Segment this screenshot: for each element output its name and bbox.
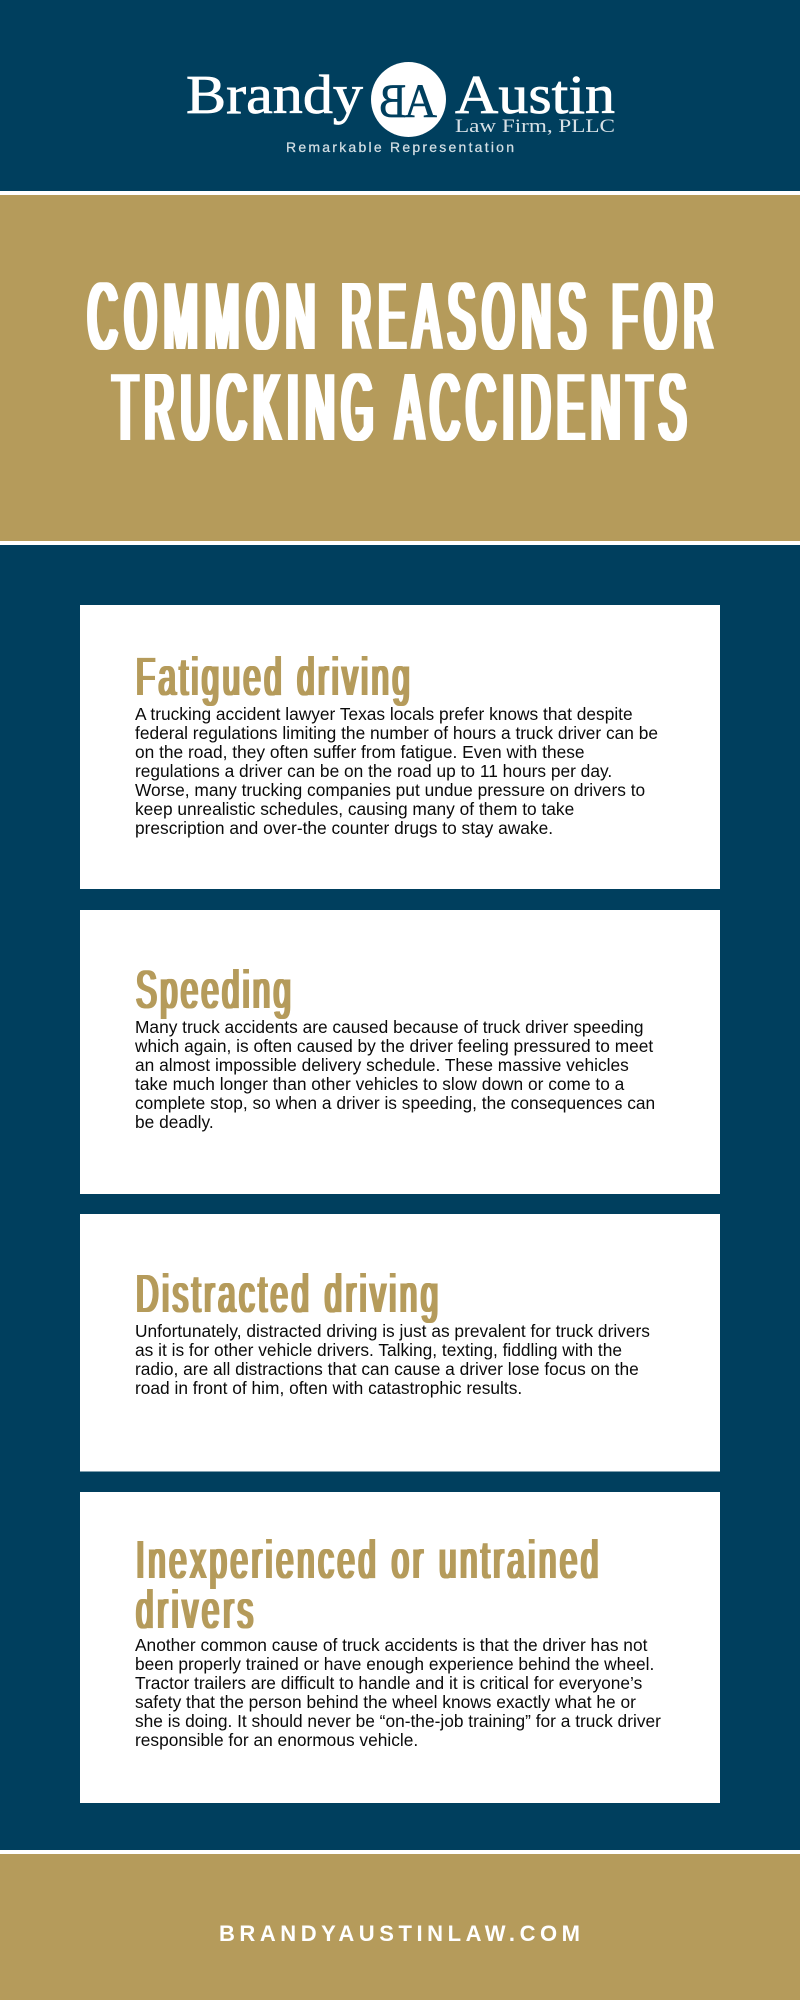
body text: distracted driving: road in front of him, often with catastrophic results. (135, 1378, 522, 1398)
white rule (0, 191, 800, 195)
logo (186, 62, 615, 155)
body text: speeding: be deadly. (135, 1112, 214, 1132)
logo emblem: BA monogram: A (404, 75, 437, 128)
panel: speeding (80, 910, 720, 1194)
white rule (0, 1850, 800, 1854)
logo wordmark: Brandy: Brandy (186, 64, 364, 125)
logo tagline: Remarkable Representation (286, 139, 514, 155)
body text: distracted driving: radio, are all distractions that can cause a driver lose focus on the (135, 1359, 639, 1379)
heading: speeding: Speeding (136, 960, 291, 1020)
body text: speeding: Many truck accidents are caused because of truck driver speeding (135, 1017, 644, 1037)
title: COMMON REASONS FOR (88, 262, 713, 370)
body text: fatigued driving: keep unrealistic schedules, causing many of them to take (135, 799, 574, 819)
body text: speeding: an almost impossible delivery schedule. These massive vehicles (135, 1055, 629, 1075)
body text: speeding (134, 1017, 655, 1132)
body text: distracted driving: as it is for other vehicle drivers. Talking, texting, fiddling with the (135, 1340, 622, 1360)
body text: fatigued driving: Worse, many trucking companies put undue pressure on drivers to (135, 780, 645, 800)
body text: inexperienced or untrained drivers: responsible for an enormous vehicle. (135, 1730, 418, 1750)
title (88, 262, 713, 461)
body text: fatigued driving (135, 704, 658, 838)
panel: inexperienced or untrained drivers (80, 1492, 720, 1803)
body text: speeding: take much longer than other vehicles to slow down or come to a (135, 1074, 625, 1094)
heading: distracted driving: Distracted driving (136, 1264, 438, 1324)
heading: inexperienced or untrained drivers: Inexperienced or untrained (136, 1530, 598, 1590)
footer band (0, 1854, 800, 2000)
body text: inexperienced or untrained drivers: Tractor trailers are difficult to handle and it is critical for everyone’s (135, 1673, 643, 1693)
heading: inexperienced or untrained drivers (136, 1530, 598, 1640)
body text: fatigued driving: prescription and over-the counter drugs to stay awake. (135, 818, 553, 838)
title band (0, 195, 800, 541)
body text: speeding: which again, is often caused by the driver feeling pressured to meet (134, 1036, 653, 1056)
header band (0, 0, 800, 191)
body text: inexperienced or untrained drivers: safety that the person behind the wheel knows exactly what he or (135, 1692, 636, 1712)
panel: distracted driving (80, 1214, 720, 1472)
heading: inexperienced or untrained drivers: drivers (136, 1580, 253, 1640)
body text: inexperienced or untrained drivers: she is doing. It should never be “on-the-job training” for a truck driver (135, 1711, 661, 1731)
logo subtitle: Law Firm, PLLC (455, 116, 615, 137)
body text: inexperienced or untrained drivers (135, 1635, 661, 1750)
body text: fatigued driving: on the road, they often suffer from fatigue. Even with these (135, 742, 585, 762)
body text: fatigued driving: regulations a driver can be on the road up to 11 hours per day. (135, 761, 612, 781)
body text: fatigued driving: federal regulations limiting the number of hours a truck driver can be (135, 723, 658, 743)
logo wordmark: Austin: Austin (455, 64, 615, 125)
white rule (0, 541, 800, 545)
body text: speeding: complete stop, so when a driver is speeding, the consequences can (135, 1093, 655, 1113)
footer url: BRANDYAUSTINLAW.COM (219, 1921, 580, 1946)
body text: inexperienced or untrained drivers: Another common cause of truck accidents is that the driver has not (135, 1635, 648, 1655)
panel: fatigued driving (80, 605, 720, 889)
logo emblem: BA monogram (371, 62, 446, 137)
main navy section (0, 545, 800, 1850)
logo emblem: BA monogram: B (379, 75, 406, 128)
body text: distracted driving (135, 1321, 650, 1398)
title: TRUCKING ACCIDENTS (113, 353, 686, 461)
body text: inexperienced or untrained drivers: been properly trained or have enough experience behind the wheel. (135, 1654, 654, 1674)
heading: fatigued driving: Fatigued driving (136, 647, 410, 707)
body text: fatigued driving: A trucking accident lawyer Texas locals prefer knows that despite (135, 704, 633, 724)
body text: distracted driving: Unfortunately, distracted driving is just as prevalent for truck drivers (135, 1321, 650, 1341)
